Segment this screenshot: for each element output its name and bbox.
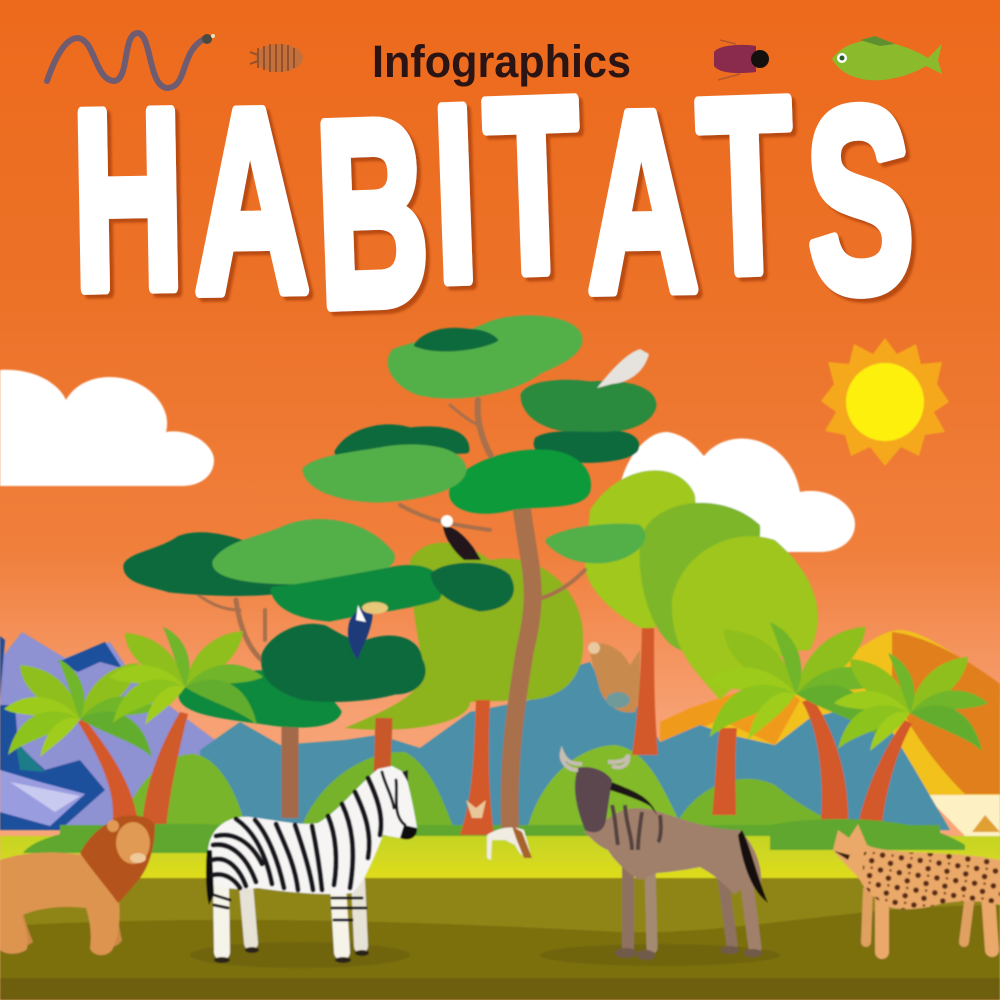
heading: Infographics: Infographics	[372, 36, 631, 87]
icon: fish	[832, 36, 942, 80]
mountains: orange right range	[660, 630, 1000, 836]
animal: lion	[0, 815, 155, 955]
mountains: left purple	[0, 632, 215, 830]
title: HABITATS: B	[312, 64, 433, 362]
icon: woodlouse	[250, 44, 303, 72]
cloud: left	[0, 370, 214, 486]
cloud: right	[618, 432, 855, 552]
title: HABITATS: A	[191, 53, 311, 348]
icon: snake	[47, 33, 215, 88]
title: HABITATS: I	[429, 54, 482, 335]
trees: lime background canopies	[345, 470, 818, 730]
animal: monkey in tree	[588, 642, 640, 713]
title: HABITATS: A	[584, 57, 700, 346]
mountains: teal range	[200, 662, 950, 840]
animal: toucan	[348, 602, 388, 660]
tree trunks and branches	[195, 400, 658, 835]
ground layers	[0, 819, 1000, 1000]
scene illustration	[0, 319, 1000, 1000]
tree canopies	[127, 319, 653, 724]
animal: zebra	[206, 766, 417, 963]
animal: small antelope	[466, 800, 532, 860]
title: HABITATS: T	[694, 45, 798, 326]
title: HABITATS: T	[481, 45, 585, 326]
title: HABITATS: H	[70, 55, 186, 344]
hills: green	[60, 745, 940, 850]
animal: wildebeest	[562, 752, 768, 960]
icon: beetle	[714, 40, 769, 80]
title: HABITATS	[70, 45, 918, 362]
palm trees	[4, 622, 988, 835]
sun	[821, 338, 949, 466]
animal: cheetah	[833, 824, 1000, 952]
title: HABITATS: S	[802, 52, 918, 348]
animal: white bird	[597, 349, 649, 388]
animal: eagle	[441, 515, 481, 560]
